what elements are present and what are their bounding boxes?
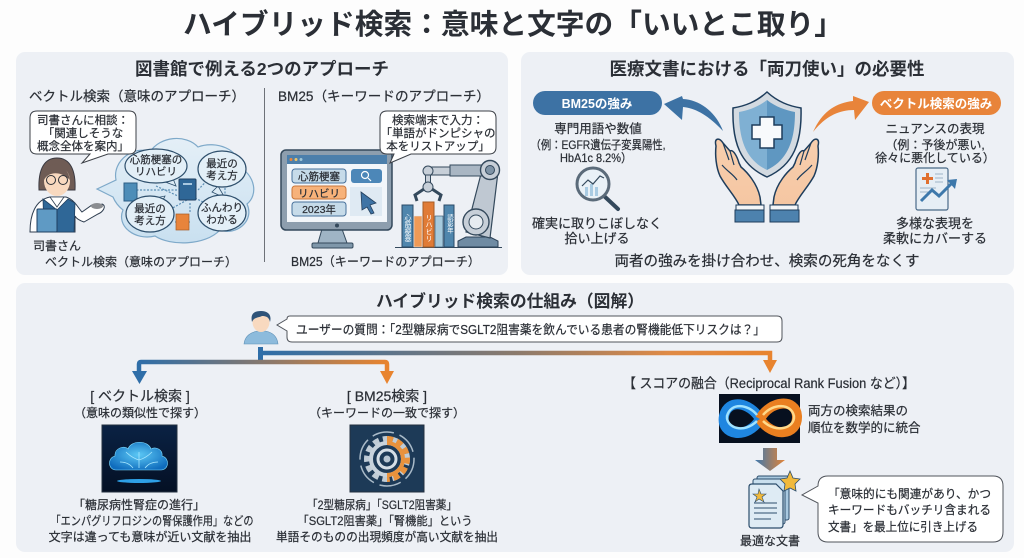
image: glowing cloud: [102, 425, 177, 492]
callout: best documents: 文書」を最上位に引き上げる: [828, 520, 978, 534]
arrows: routing to searches: [132, 347, 777, 384]
column: vector search: 「糖尿病性腎症の進行」: [73, 498, 205, 512]
text block: BM25 strength: [530, 121, 666, 246]
column: BM25 search: [ BM25検索 ]: [347, 388, 427, 404]
icon: magnifying glass: [577, 168, 618, 209]
icon: idea cloud: 考え方: [206, 169, 238, 182]
callout: user question: ユーザーの質問：「2型糖尿病でSGLT2阻害薬を飲んでいる患者の腎機能低下リスクは？」: [296, 322, 765, 337]
callout: best documents: キーワードもバッチリ含まれる: [828, 503, 991, 517]
icon: idea cloud: リハビリ: [135, 166, 177, 178]
text block: vector strength: 多様な表現を: [896, 216, 974, 231]
icon: idea cloud: 最近の: [206, 158, 238, 170]
panel: library analogy: [16, 52, 508, 275]
icon: best documents: [749, 471, 800, 528]
column: BM25 search: [276, 388, 498, 544]
text block: BM25 strength: 確実に取りこぼしなく: [532, 216, 662, 231]
badge: vector strength: ベクトル検索の強み: [880, 96, 992, 111]
column: score fusion: 順位を数学的に統合: [808, 420, 921, 435]
icon: idea cloud: [97, 138, 254, 243]
icon: computer monitor: [281, 150, 392, 248]
text block: vector strength: ニュアンスの表現: [885, 122, 985, 136]
icon: computer monitor: 2023年: [302, 203, 336, 216]
callout: user question: [277, 316, 782, 342]
icon: robot arm and books: 読影年: [446, 213, 454, 235]
callout: librarian: 概念全体を案内」: [37, 139, 129, 153]
arrow: to vector: [813, 96, 869, 132]
callout: search terminal: [380, 111, 496, 163]
callout: search terminal: 検索端末で入力：: [392, 113, 484, 127]
icon: medical chart: [916, 168, 957, 210]
heading: library analogy: 図書館で例える2つのアプローチ: [135, 59, 389, 79]
text block: vector strength: （例：予後が悪い,: [885, 137, 985, 152]
panel: how hybrid search works: [16, 283, 1014, 552]
icon: robot arm and books: [395, 160, 502, 248]
icon: robot arm and books: リハビリ: [425, 214, 432, 242]
conclusion: 両者の強みを掛け合わせ、検索の死角をなくす: [614, 253, 920, 270]
caption: vector: ベクトル検索（意味のアプローチ）: [45, 255, 237, 269]
heading: mechanism: ハイブリッド検索の仕組み（図解）: [376, 291, 644, 311]
badge: vector strength: [872, 91, 1001, 115]
subheading: BM25 approach: BM25（キーワードのアプローチ）: [278, 89, 490, 104]
icon: computer monitor: リハビリ: [298, 188, 340, 200]
icon: librarian: [30, 158, 104, 232]
text block: vector strength: 徐々に悪化している）: [875, 151, 995, 165]
text block: BM25 strength: HbA1c 8.2%）: [560, 151, 632, 165]
panel: medical documents: [521, 52, 1014, 275]
column: score fusion: 最適な文書: [740, 534, 800, 548]
callout: search terminal: 「単語がドンピシャの: [380, 126, 496, 140]
column: score fusion: 両方の検索結果の: [808, 403, 908, 418]
icon: shield and hands: [716, 92, 818, 222]
callout: librarian: 「関連しそうな: [43, 126, 123, 140]
text block: vector strength: 柔軟にカバーする: [883, 231, 987, 246]
badge: BM25 strength: BM25の強み: [562, 96, 632, 111]
callout: best documents: 「意味的にも関連があり、かつ: [828, 486, 991, 501]
image: infinity swirl: [719, 394, 800, 443]
column: BM25 search: 単語そのものの出現頻度が高い文献を抽出: [276, 529, 498, 544]
icon: robot arm and books: 心筋梗塞: [404, 213, 412, 242]
icon: idea cloud: わかる: [206, 214, 238, 226]
column: BM25 search: 「SGLT2阻害薬」「腎機能」という: [298, 514, 472, 528]
column: vector search: [49, 388, 254, 544]
column: score fusion: [623, 376, 1003, 548]
text block: BM25 strength: 拾い上げる: [564, 231, 630, 246]
icon: idea cloud: 最近の: [134, 203, 166, 215]
column: score fusion: 【 スコアの融合（Reciprocal Rank Fusion など）】: [623, 376, 915, 391]
column: vector search: [ ベクトル検索 ]: [90, 388, 190, 404]
arrow: to best documents: [755, 448, 785, 471]
subheading: vector approach: ベクトル検索（意味のアプローチ）: [29, 89, 245, 104]
callout: best documents: [802, 476, 1003, 542]
icon: idea cloud: 心筋梗塞の: [130, 153, 182, 166]
callout: librarian: 司書さんに相談：: [37, 113, 129, 127]
column: vector search: 文字は違っても意味が近い文献を抽出: [49, 529, 251, 544]
label: librarian: 司書さん: [33, 239, 81, 253]
icon: computer monitor: 心筋梗塞: [298, 170, 340, 183]
column: BM25 search: 「2型糖尿病」「SGLT2阻害薬」: [307, 498, 457, 512]
text block: BM25 strength: 専門用語や数値: [554, 121, 642, 136]
badge: BM25 strength: [533, 91, 662, 115]
text block: BM25 strength: （例：EGFR遺伝子変異陽性,: [530, 137, 666, 152]
column: vector search: 「エンパグリフロジンの腎保護作用」などの: [50, 513, 254, 528]
text block: vector strength: [875, 122, 995, 246]
column: vector search: （意味の類似性で探す）: [74, 406, 206, 420]
heading: dual use: 医療文書における「両刀使い」の必要性: [610, 59, 924, 79]
arrow: to BM25: [664, 96, 723, 131]
callout: librarian: [30, 111, 136, 163]
title: ハイブリッド検索：意味と文字の「いいとこ取り」: [183, 8, 843, 41]
icon: user: [244, 311, 278, 344]
icon: idea cloud: ふんわり: [201, 202, 243, 214]
icon: idea cloud: 考え方: [134, 214, 166, 227]
callout: search terminal: 本をリストアップ」: [386, 139, 490, 153]
caption: BM25: BM25（キーワードのアプローチ）: [291, 255, 480, 269]
image: gear: [350, 425, 424, 492]
column: BM25 search: （キーワードの一致で探す）: [309, 406, 465, 420]
